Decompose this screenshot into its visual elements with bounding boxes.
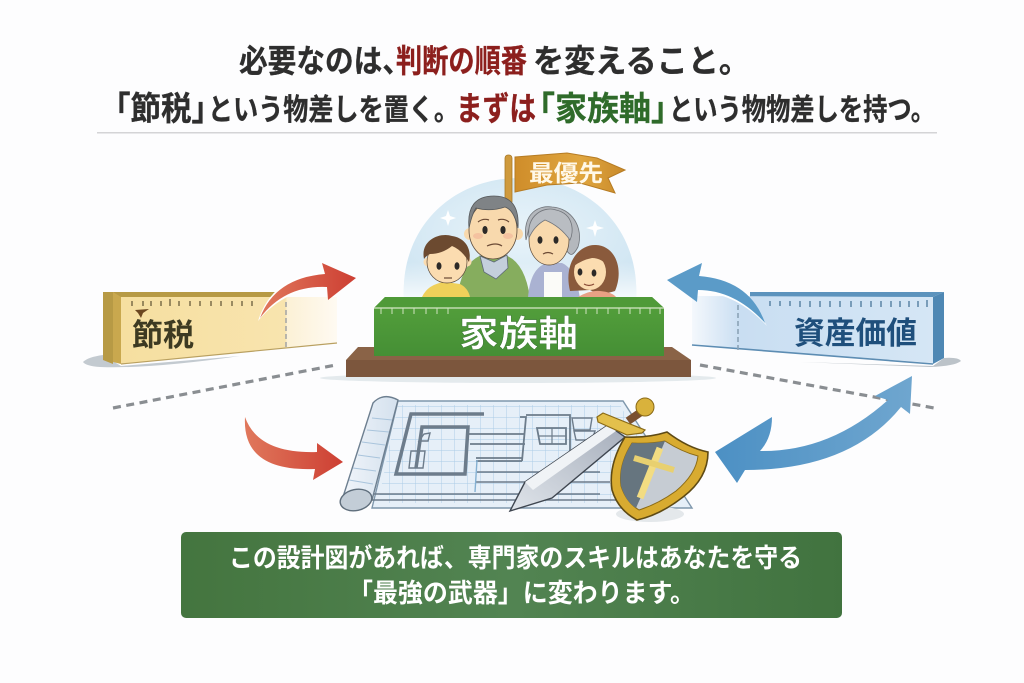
arrow: red upper [258, 263, 356, 321]
dashed line right [700, 365, 934, 408]
pedestal: family axis block [320, 297, 716, 383]
ruler: tax saving [83, 292, 337, 367]
title line 2: という物物差しを持つ。 [669, 94, 935, 127]
backdrop dome [404, 178, 636, 298]
roll [338, 397, 398, 514]
grandfather [457, 196, 530, 298]
shield [611, 432, 708, 522]
message line 1: この設計図があれば、専門家のスキルはあなたを守る [229, 543, 802, 573]
label: asset value: 資産価値 [794, 316, 917, 351]
title line 2: 「家族軸」 [523, 90, 683, 127]
label: tax saving: 節税 [132, 318, 194, 353]
title line 2: という物差しを置く。 [208, 94, 459, 127]
title line 2 [100, 90, 935, 127]
blueprint [338, 397, 708, 522]
message panel [181, 532, 842, 618]
block label: 家族軸 [459, 313, 578, 354]
title line 1: を変えること。 [533, 43, 750, 79]
boy [422, 235, 472, 297]
sword [510, 398, 654, 511]
title [100, 43, 935, 127]
family illustration [404, 153, 636, 298]
flag: top priority [505, 153, 625, 205]
girl [568, 245, 619, 297]
dashed line left [113, 365, 336, 408]
floor plan lines [370, 414, 620, 500]
flag label: 最優先 [529, 160, 603, 186]
title line 1: 必要なのは、 [239, 43, 411, 79]
title line 1 [239, 43, 750, 79]
ruler: asset value [692, 292, 961, 367]
sheet [372, 401, 692, 508]
arrow: red lower [245, 417, 343, 480]
arrow: blue upper [667, 263, 767, 326]
message line 2: 「最強の武器」に変わります。 [348, 578, 695, 608]
grandmother [525, 207, 580, 298]
green block [374, 297, 664, 356]
wooden base [346, 347, 691, 377]
title line 2: まずは [456, 90, 536, 127]
title line 2: 「節税」 [100, 90, 222, 127]
arrow: blue double-headed [715, 376, 912, 483]
title line 1: 判断の順番 [396, 43, 527, 79]
